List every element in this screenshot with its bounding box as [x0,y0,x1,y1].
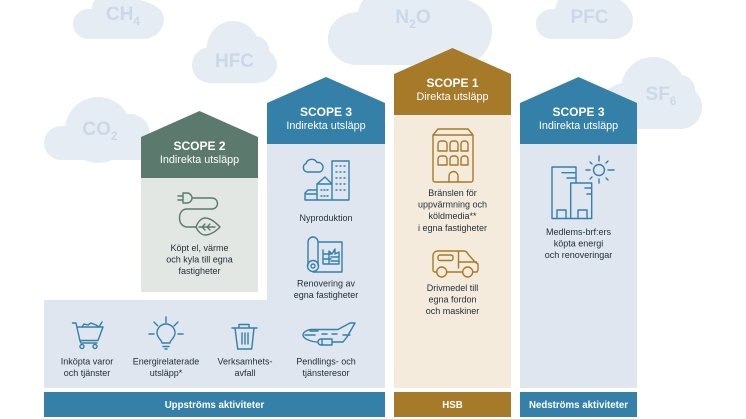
text: Nyproduktion: Nyproduktion [299,213,353,223]
text: member co-ops [545,227,612,260]
icon: member buildings with sun [552,156,614,218]
icon: light bulb [149,317,183,349]
icon: shopping cart [72,322,103,348]
icon: van [433,251,478,277]
heading: scope 2 [141,111,258,178]
cloud: N2O: 2 [409,17,416,31]
text: renovation: egna fastigheter [294,290,358,300]
icon: waste bin [232,324,257,349]
text: vehicle fuels: Drivmedel till [427,283,478,293]
icon: apartment building [433,129,473,182]
cloud: N2O [328,0,492,65]
heading: scope 3: SCOPE 3 [300,105,352,119]
cloud: SF6 [600,57,702,130]
text: member co-ops: köpta energi [554,238,603,248]
text: purchased goods: och tjänster [64,368,110,378]
text: vehicle fuels [426,283,479,316]
heading: scope 1 [394,48,511,115]
cloud: CO2 [44,97,150,163]
cloud: SF6: 6 [670,94,677,108]
text: scope 2 description [166,243,233,276]
heading: scope 1: SCOPE 1 [426,76,479,90]
text: fuels for heating: Bränslen för [428,188,477,198]
heading: scope 3 [267,77,385,144]
cloud: CH4 [73,0,164,39]
text: fuels for heating: uppvärmning och [418,200,487,210]
icon: airplane [303,323,355,345]
text: energy related: utsläpp* [150,368,183,378]
text: vehicle fuels: egna fordon [428,294,477,304]
cloud: CO2: CO [82,119,111,140]
icon: renovation blueprint [308,237,342,272]
cloud: N2O: N [395,7,409,28]
cloud: N2O: O [416,7,431,28]
text: energy related [133,356,199,378]
icon: plug and leaf [178,193,220,235]
text: fuels for heating: i egna fastigheter [418,223,487,233]
text: waste [217,356,273,378]
text: vehicle fuels: och maskiner [426,306,479,316]
bar: downstream: Nedströms aktiviteter [529,400,628,411]
panel: scope 2 [141,111,258,292]
icon: new buildings [303,159,349,200]
cloud: PFC [536,0,633,39]
heading: scope 3 downstream [520,77,637,144]
panel: scope 3 left [267,77,385,300]
text: purchased goods [61,356,113,378]
text: commuting and business travel: tjänsteresor [302,368,350,378]
bar: downstream [520,392,637,417]
text: waste: Verksamhets- [217,356,273,366]
bar: HSB: HSB [442,400,463,411]
text: renovation [294,278,358,300]
text: scope 2 description: fastigheter [178,266,221,276]
text: scope 2 description: Köpt el, värme [170,243,229,253]
cloud: HFC [192,21,277,83]
bar: upstream: Uppströms aktiviteter [165,400,265,411]
panel: upstream activities [44,144,385,388]
cloud: SF6: SF [646,84,670,105]
text: member co-ops: och renoveringar [545,250,612,260]
text: waste: avfall [234,368,256,378]
text: scope 2 description: och kyla till egna [166,254,233,264]
heading: scope 1: Direkta utsläpp [416,91,489,103]
panel: scope 3 right [520,77,637,388]
cloud: HFC: HFC [215,51,254,72]
text: member co-ops: Medlems-brf:ers [546,227,612,237]
cloud: CH4: 4 [133,14,140,28]
text: energy related: Energirelaterade [133,356,199,366]
text: fuels for heating: köldmedia** [428,211,477,221]
cloud: CO2: 2 [111,129,118,143]
heading: scope 3 downstream: Indirekta utsläpp [539,120,618,132]
text: commuting and business travel: Pendlings- och [296,356,356,366]
text: fuels for heating [418,188,487,233]
cloud: PFC: PFC [570,7,609,28]
panel: scope 1 [394,48,511,388]
text: renovation: Renovering av [297,278,356,288]
heading: scope 3: Indirekta utsläpp [286,120,366,132]
heading: scope 2: SCOPE 2 [173,139,226,153]
bar: HSB [394,392,511,417]
heading: scope 3 downstream: SCOPE 3 [552,105,605,119]
heading: scope 2: Indirekta utsläpp [160,154,239,166]
bar: upstream [44,392,385,417]
cloud: CH4: CH [106,4,133,25]
text: commuting and business travel [296,356,356,378]
text: purchased goods: Inköpta varor [61,356,113,366]
